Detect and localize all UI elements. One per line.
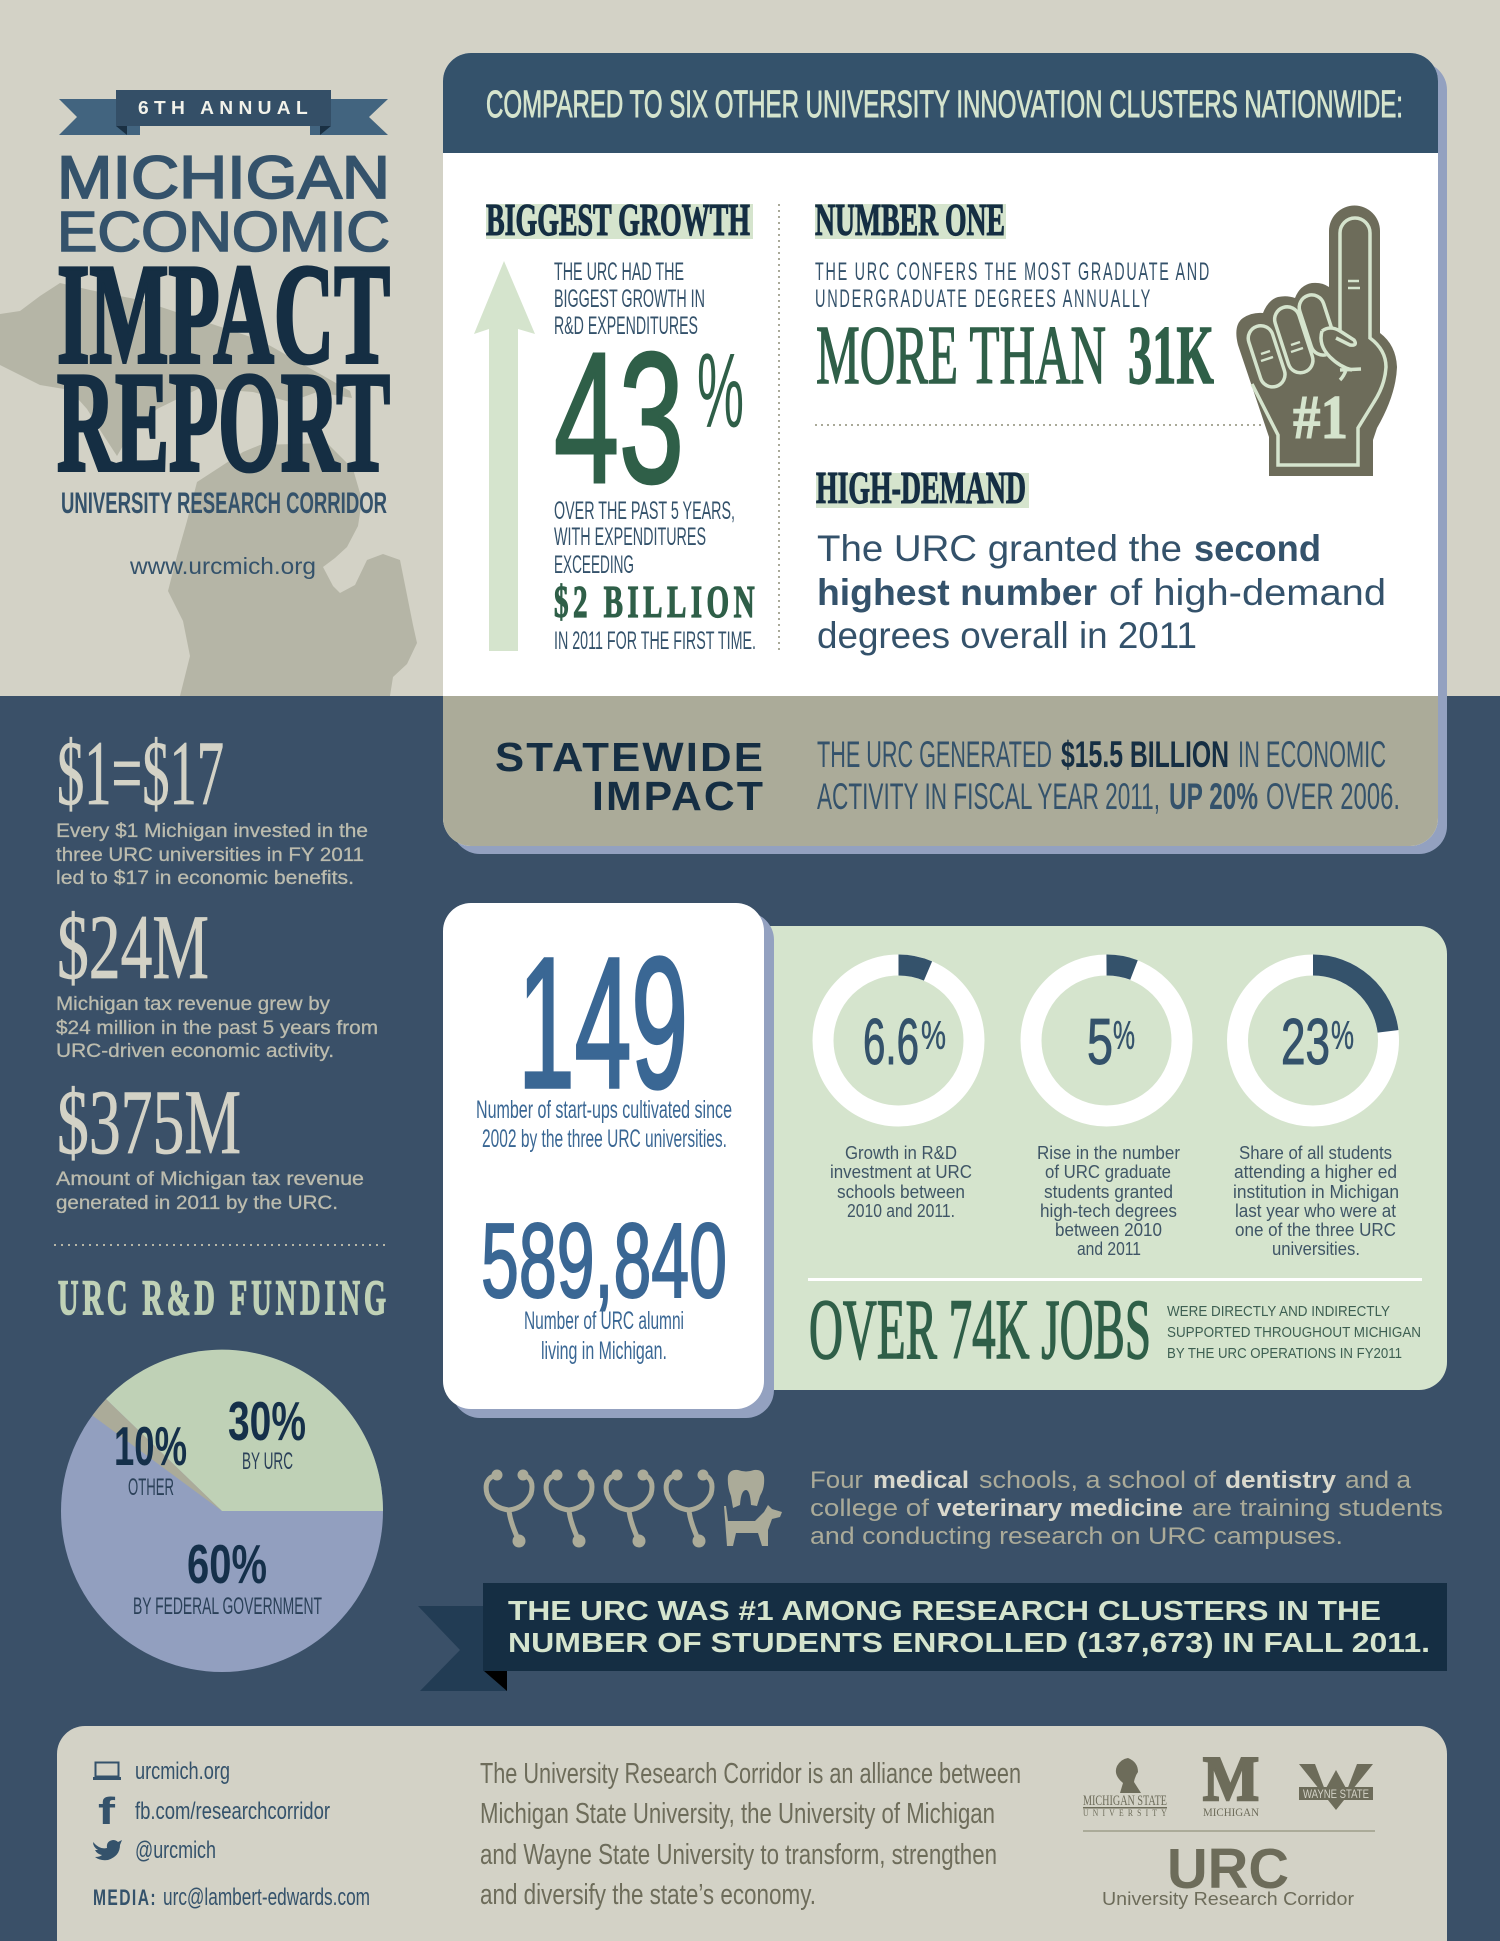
heading: high-demand: HIGH-DEMAND xyxy=(816,463,1026,513)
text: R&D investment growth: Growth in R&D xyxy=(845,1143,957,1163)
heading: number one: NUMBER ONE xyxy=(815,195,1005,245)
number: 589,840 alumni xyxy=(481,1202,727,1365)
icon: stethoscope 3 xyxy=(606,1470,652,1548)
contact: twitter xyxy=(93,1837,216,1864)
contact: website: urcmich.org xyxy=(135,1758,230,1785)
pie chart: R&D funding xyxy=(61,1350,383,1672)
number: more than 31k: 31K xyxy=(1128,309,1214,402)
text: growth detail xyxy=(554,497,759,655)
icon: stethoscope 2 xyxy=(546,1470,592,1548)
text: statewide impact detail: ACTIVITY IN FISCAL YEAR 2011, xyxy=(817,776,1160,817)
title: UNIVERSITY RESEARCH CORRIDOR xyxy=(61,487,387,520)
text: high-demand detail: of high-demand xyxy=(1109,572,1386,613)
title: ECONOMIC xyxy=(57,200,390,264)
text: growth detail: $2 BILLION xyxy=(554,576,759,627)
label: 60% by federal government: BY FEDERAL GOVERNMENT xyxy=(133,1593,322,1620)
text: high-demand detail: degrees overall in 2011 xyxy=(817,615,1197,656)
ribbon banner: enrollment: NUMBER OF STUDENTS ENROLLED (137,673) IN FALL 2011. xyxy=(508,1627,1430,1658)
logo: URC: University Research Corridor xyxy=(1102,1889,1354,1909)
label: 30% by URC xyxy=(228,1390,306,1475)
icon: foam finger number one xyxy=(1236,206,1397,476)
text: high-tech degrees: Rise in the number xyxy=(1037,1143,1180,1163)
icon: foam finger number one: #1 xyxy=(1293,384,1348,452)
stat: $24M: $24M xyxy=(57,896,209,998)
text: high-demand detail: second xyxy=(1194,528,1321,569)
title xyxy=(57,144,390,520)
donut: 6.6 percent: 6.6 xyxy=(863,1005,919,1078)
contact: twitter: @urcmich xyxy=(135,1837,216,1864)
heading: high-demand xyxy=(816,463,1029,513)
contact: facebook: f xyxy=(98,1791,115,1833)
stat: $1 = $17: $1=$17 xyxy=(57,722,224,824)
jobs headline: OVER 74K JOBS xyxy=(809,1281,1151,1377)
ribbon banner: enrollment: THE URC WAS #1 AMONG RESEARCH CLUSTERS IN THE xyxy=(508,1595,1381,1626)
stat: $1 = $17: three URC universities in FY 2011 xyxy=(56,844,364,866)
text: about the URC xyxy=(480,1758,1021,1911)
title: REPORT xyxy=(57,343,390,501)
text: statewide impact detail xyxy=(817,734,1400,817)
text: medical schools: and conducting research on URC campuses. xyxy=(810,1523,1343,1550)
text: growth detail: IN 2011 FOR THE FIRST TIME. xyxy=(554,627,756,655)
contact: media: MEDIA: xyxy=(93,1885,157,1910)
donut: 5 percent: 5 xyxy=(1087,1005,1113,1078)
text: statewide impact detail: $15.5 BILLION xyxy=(1061,734,1229,775)
text: share of students: Share of all students xyxy=(1239,1143,1392,1163)
logo: Michigan: M xyxy=(1203,1743,1259,1814)
text: statewide impact detail: THE URC GENERATED xyxy=(817,734,1052,775)
stat: $24M: URC-driven economic activity. xyxy=(56,1040,334,1062)
stat: $375M: generated in 2011 by the URC. xyxy=(56,1192,338,1214)
stat: $375M: $375M xyxy=(57,1071,241,1173)
text: R&D investment growth xyxy=(830,1143,972,1221)
text: medical schools xyxy=(810,1467,1443,1550)
stat: $1 = $17: Every $1 Michigan invested in the xyxy=(56,820,368,842)
logo: Wayne State: WAYNE STATE xyxy=(1303,1787,1369,1801)
heading: URC R&D funding: URC R&D FUNDING xyxy=(58,1269,390,1325)
text: high-tech degrees: and 2011 xyxy=(1077,1239,1141,1259)
donut: 23 percent xyxy=(1238,965,1388,1116)
contact: facebook xyxy=(98,1791,330,1833)
number: 589,840 alumni: living in Michigan. xyxy=(541,1337,667,1365)
stat: $24M xyxy=(56,896,378,1062)
text: high-tech degrees: of URC graduate xyxy=(1045,1162,1171,1182)
text: medical schools: schools, a school of xyxy=(979,1467,1216,1494)
text: share of students: last year who were at xyxy=(1235,1201,1396,1221)
ribbon: 6th annual xyxy=(59,90,388,135)
stat: $375M: Amount of Michigan tax revenue xyxy=(56,1168,364,1190)
label: 60% by federal government: 60% xyxy=(187,1533,267,1595)
text: share of students: institution in Michigan xyxy=(1233,1182,1399,1202)
panel: green stats card xyxy=(740,926,1447,1390)
text: high-demand detail: highest number xyxy=(817,572,1097,613)
logo: Michigan: MICHIGAN xyxy=(1203,1805,1259,1819)
heading: biggest growth xyxy=(486,195,753,245)
label: 10% other xyxy=(114,1415,187,1501)
title: IMPACT xyxy=(57,235,390,393)
text: about the URC: and Wayne State University to transform, strengthen xyxy=(480,1839,997,1871)
ribbon: 6th annual: 6TH ANNUAL xyxy=(138,98,313,118)
text: about the URC: Michigan State University, the University of Michigan xyxy=(480,1798,995,1830)
text: medical schools: Four xyxy=(810,1467,863,1494)
number: 589,840 alumni: 589,840 xyxy=(481,1202,727,1320)
map of Michigan silhouette xyxy=(0,283,417,696)
logo: URC: URC xyxy=(1167,1837,1289,1901)
text: jobs detail xyxy=(1167,1303,1421,1362)
text: share of students xyxy=(1233,1143,1399,1259)
icons: stethoscopes, tooth and dog xyxy=(486,1470,782,1548)
title: MICHIGAN xyxy=(57,144,390,211)
number: 43 percent: 43 xyxy=(554,315,684,522)
label: 10% other: 10% xyxy=(114,1415,187,1477)
contact: media xyxy=(93,1884,370,1911)
text: growth detail: EXCEEDING xyxy=(554,551,634,579)
logo: Wayne State xyxy=(1299,1764,1373,1810)
text: high-demand detail xyxy=(817,528,1386,656)
text: jobs detail: SUPPORTED THROUGHOUT MICHIGAN xyxy=(1167,1324,1421,1341)
heading: number one xyxy=(815,195,1006,245)
heading: biggest growth: BIGGEST GROWTH xyxy=(486,195,750,245)
logo: Michigan State xyxy=(1083,1758,1171,1818)
number: more than 31k: MORE THAN xyxy=(816,309,1106,402)
logo: URC xyxy=(1102,1837,1354,1909)
text: high-tech degrees xyxy=(1037,1143,1180,1259)
text: R&D investment growth: 2010 and 2011. xyxy=(847,1201,955,1221)
icon: dog xyxy=(724,1505,782,1546)
number: 149 start-ups: 2002 by the three URC universities. xyxy=(482,1125,727,1153)
text: medical schools: college of xyxy=(810,1495,929,1522)
heading: statewide impact: STATEWIDE xyxy=(495,734,765,780)
donut: 23 percent: 23 xyxy=(1281,1005,1330,1078)
logo: Michigan State: MICHIGAN STATE xyxy=(1083,1793,1167,1809)
contact: facebook: fb.com/researchcorridor xyxy=(135,1798,330,1825)
label: 60% by federal government xyxy=(133,1533,322,1620)
text: degrees xyxy=(815,258,1211,313)
text: medical schools: medical xyxy=(873,1467,969,1494)
label: 10% other: OTHER xyxy=(128,1474,174,1501)
text: degrees: UNDERGRADUATE DEGREES ANNUALLY xyxy=(815,285,1152,313)
text: growth detail: OVER THE PAST 5 YEARS, xyxy=(554,497,735,525)
label: 30% by URC: 30% xyxy=(228,1390,306,1452)
donut: 23 percent: % xyxy=(1331,1014,1354,1058)
panel: footer xyxy=(57,1726,1447,1941)
text: R&D investment growth: schools between xyxy=(837,1182,965,1202)
text: high-demand detail: The URC granted the xyxy=(817,528,1182,569)
icon: stethoscope 4 xyxy=(666,1470,712,1548)
text: growth detail: WITH EXPENDITURES xyxy=(554,523,706,551)
donut: 5 percent xyxy=(1031,965,1182,1116)
stat: $24M: $24 million in the past 5 years from xyxy=(56,1017,378,1039)
text: high-tech degrees: between 2010 xyxy=(1055,1220,1162,1240)
text: statewide impact detail: IN ECONOMIC xyxy=(1238,734,1386,775)
number: 589,840 alumni: Number of URC alumni xyxy=(524,1307,684,1335)
text: statewide impact detail: UP 20% xyxy=(1169,776,1258,817)
number: 149 start-ups xyxy=(476,920,732,1153)
donut: 6.6 percent: % xyxy=(921,1014,946,1058)
number: 149 start-ups: Number of start-ups cultivated since xyxy=(476,1096,732,1124)
text: statewide impact detail: OVER 2006. xyxy=(1266,776,1400,817)
contact: media: urc@lambert-edwards.com xyxy=(163,1884,370,1911)
stat: $1 = $17: led to $17 in economic benefits. xyxy=(56,867,354,889)
text: jobs detail: WERE DIRECTLY AND INDIRECTLY xyxy=(1167,1303,1390,1320)
text: about the URC: The University Research Corridor is an alliance between xyxy=(480,1758,1021,1790)
text: about the URC: and diversify the state’s economy. xyxy=(480,1879,816,1911)
text: share of students: one of the three URC xyxy=(1235,1220,1396,1240)
text: medical schools: and a xyxy=(1345,1467,1412,1494)
donut: 5 percent: % xyxy=(1113,1014,1135,1058)
heading: statewide impact xyxy=(495,734,765,819)
text: medical schools: veterinary medicine xyxy=(937,1495,1183,1522)
logo: Michigan State: UNIVERSITY xyxy=(1083,1808,1171,1818)
icon: tooth xyxy=(728,1470,764,1508)
heading: statewide impact: IMPACT xyxy=(592,773,765,819)
stat: $375M xyxy=(56,1071,364,1214)
contact: website xyxy=(93,1758,230,1785)
text: degrees: THE URC CONFERS THE MOST GRADUATE AND xyxy=(815,258,1211,286)
text: R&D investment growth: investment at URC xyxy=(830,1162,972,1182)
label: 30% by URC: BY URC xyxy=(242,1448,293,1475)
arrow up xyxy=(474,261,535,651)
stat: $1 = $17 xyxy=(56,722,368,889)
icon: stethoscope 1 xyxy=(486,1470,532,1548)
text: medical schools: are training students xyxy=(1192,1495,1443,1522)
text: share of students: universities. xyxy=(1272,1239,1360,1259)
donut: 6.6 percent xyxy=(823,965,974,1116)
text: medical schools: dentistry xyxy=(1225,1467,1337,1494)
text: growth intro: THE URC HAD THE xyxy=(554,258,684,286)
panel: comparison card: % xyxy=(697,332,744,450)
text: growth intro xyxy=(554,258,705,340)
text: growth intro: BIGGEST GROWTH IN xyxy=(554,285,705,313)
text: jobs detail: BY THE URC OPERATIONS IN FY2011 xyxy=(1167,1345,1402,1362)
number: 149 start-ups: 149 xyxy=(518,920,688,1127)
ribbon banner: enrollment xyxy=(418,1583,1447,1691)
panel: comparison card xyxy=(443,53,1447,854)
stat: $24M: Michigan tax revenue grew by xyxy=(56,993,330,1015)
text: share of students: attending a higher ed xyxy=(1234,1162,1397,1182)
text: high-tech degrees: students granted xyxy=(1044,1182,1173,1202)
text: growth intro: R&D EXPENDITURES xyxy=(554,312,698,340)
panel: white stats card xyxy=(443,903,774,1418)
text: high-tech degrees: high-tech degrees xyxy=(1040,1201,1177,1221)
website url: www.urcmich.org xyxy=(129,553,316,579)
